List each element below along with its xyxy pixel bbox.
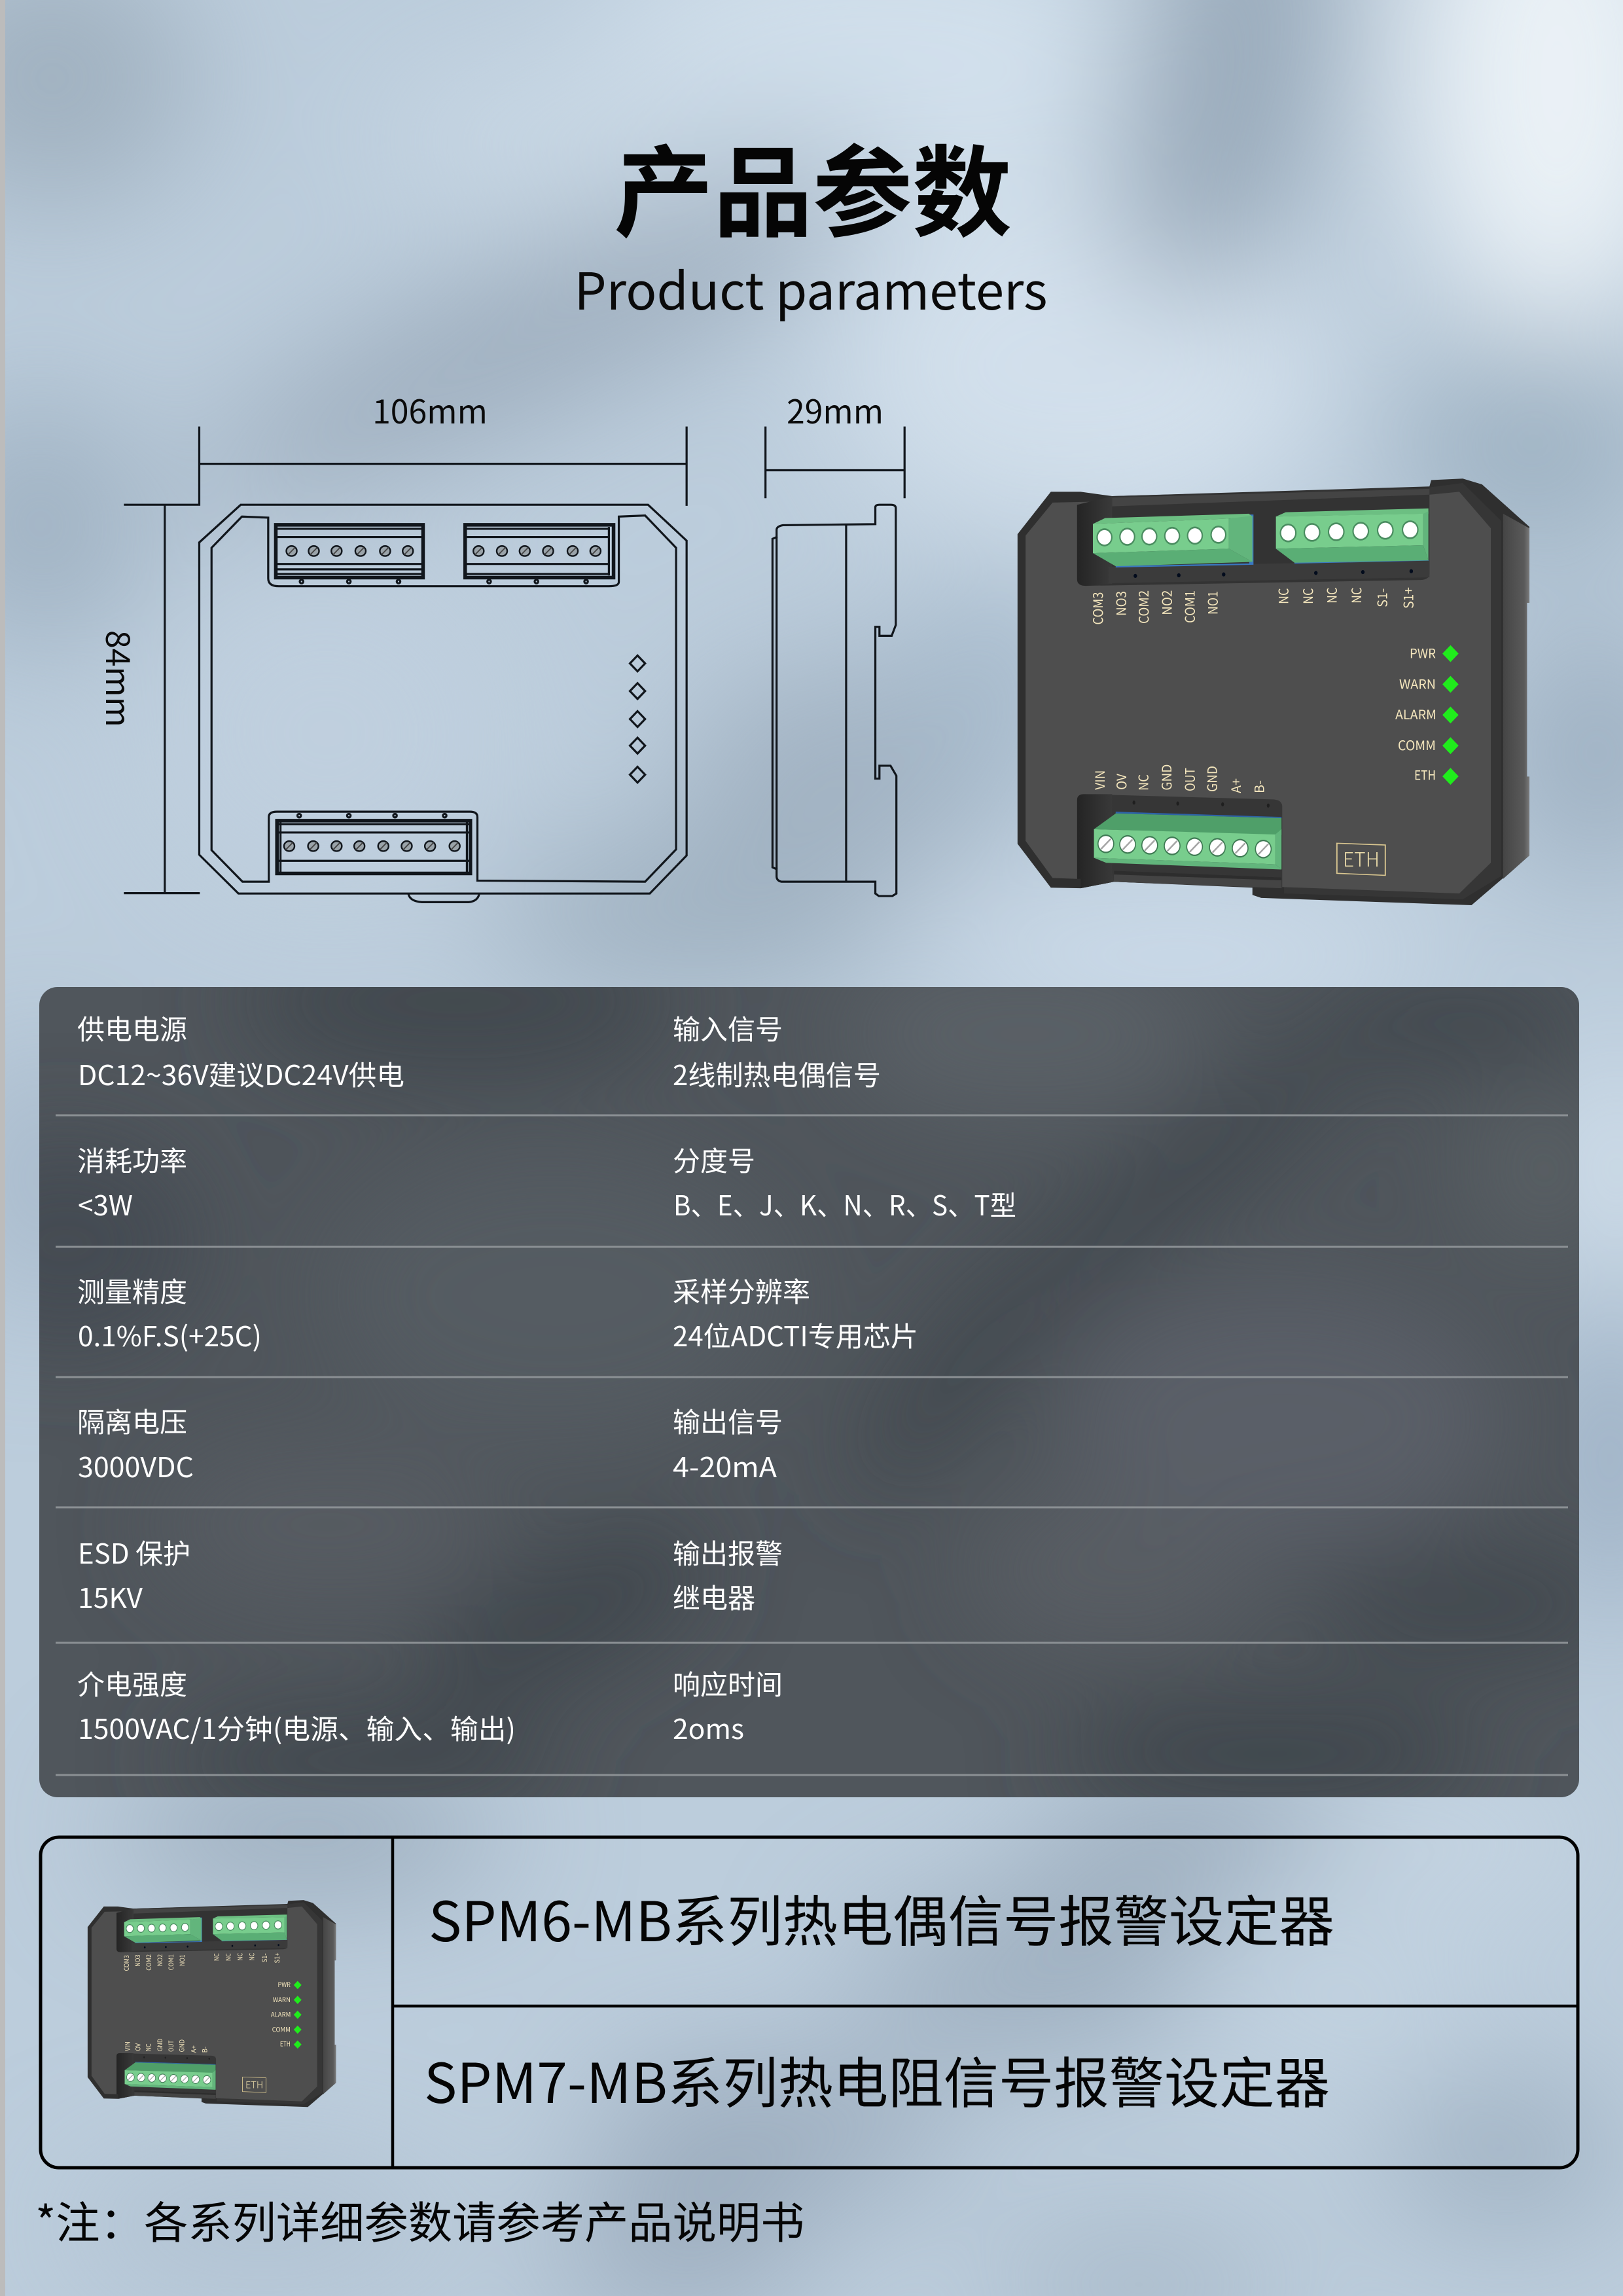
small device labels: ETH [280, 2039, 291, 2048]
device labels: S1- [1372, 588, 1391, 607]
spec: ESD: ESD 保护 [78, 1532, 190, 1572]
bottom recess [1077, 794, 1282, 888]
connector top left [1116, 514, 1253, 567]
small device labels: S1+ [272, 1952, 281, 1964]
spec: accuracy: 测量精度 [77, 1270, 187, 1310]
small device labels: COM2 [144, 1954, 153, 1971]
dimension label: 84mm: 84mm [96, 630, 143, 727]
device labels: ALARM [1395, 704, 1436, 723]
small device labels: ETH [245, 2078, 263, 2092]
device labels: OUT [1179, 768, 1198, 791]
small device labels: ALARM [271, 2010, 291, 2019]
device labels: PWR [1410, 643, 1436, 662]
spec: sampling resolution: 采样分辨率 [673, 1270, 810, 1310]
spec: response time: 2oms [673, 1708, 744, 1748]
top recess [1077, 488, 1429, 586]
terminal block: top left [276, 525, 423, 583]
device labels: COM3 [1088, 592, 1107, 624]
device labels: OV [1111, 774, 1130, 790]
small device labels: COM1 [166, 1954, 175, 1970]
table row dividers [56, 1115, 1568, 1775]
device labels: ETH [1414, 764, 1436, 784]
small device labels: NO1 [177, 1954, 187, 1966]
spec: output alarm [673, 1532, 783, 1617]
device labels: COMM [1398, 735, 1436, 754]
spec: dielectric strength: 1500VAC/1分钟(电源、输入、输出) [78, 1708, 516, 1748]
spec: output signal: 输出信号 [673, 1401, 783, 1441]
spec: ESD: 15KV [78, 1577, 143, 1617]
small device labels [122, 1952, 291, 2092]
device labels: NC [1133, 774, 1152, 791]
spec: input signal: 2线制热电偶信号 [673, 1054, 881, 1094]
small device labels: S1- [260, 1953, 269, 1962]
spec: power supply: DC12~36V建议DC24V供电 [78, 1054, 404, 1094]
small device labels: GND [177, 2039, 187, 2052]
small device labels: A+ [188, 2045, 198, 2053]
small device labels: COMM [272, 2024, 291, 2034]
small device labels: OV [133, 2043, 142, 2051]
device labels: GND [1156, 764, 1175, 791]
small device labels: NC [235, 1953, 244, 1961]
spec: power supply: 供电电源 [77, 1008, 187, 1048]
small device labels: NO2 [155, 1954, 164, 1966]
spec: dielectric strength [77, 1663, 516, 1748]
spec: accuracy: 0.1%F.S(+25C) [78, 1315, 262, 1355]
small device labels: NC [224, 1953, 233, 1961]
small device labels: OUT [166, 2040, 175, 2052]
side view line drawing [772, 505, 897, 896]
ETH label: ETH [1343, 844, 1380, 872]
connector bottom [1116, 812, 1281, 818]
spec: isolation voltage: 隔离电压 [77, 1401, 187, 1441]
dimension lines [124, 427, 904, 893]
device labels: NC [1346, 587, 1365, 603]
spec: graduation: B、E、J、K、N、R、S、T型 [673, 1184, 1016, 1224]
device labels: NO2 [1157, 590, 1175, 615]
connector top right [1294, 560, 1429, 564]
spec: response time: 响应时间 [673, 1663, 783, 1703]
spec: output signal [673, 1401, 783, 1486]
small device labels: NC [144, 2043, 153, 2051]
spec: ESD [78, 1532, 190, 1617]
spec: output alarm: 输出报警 [673, 1532, 783, 1572]
spec: isolation voltage: 3000VDC [78, 1446, 194, 1486]
spec: input signal: 输入信号 [673, 1008, 783, 1048]
device labels: COM2 [1133, 590, 1152, 624]
spec: power supply [77, 1008, 404, 1094]
device labels: COM1 [1179, 590, 1198, 623]
small device labels: PWR [277, 1980, 291, 1989]
device labels: WARN [1399, 674, 1436, 692]
device labels: S1+ [1398, 587, 1418, 609]
device body and terminals [1018, 478, 1529, 905]
device labels: B- [1249, 780, 1268, 793]
front view line drawing [199, 505, 687, 902]
spec: isolation voltage [77, 1401, 194, 1486]
dimension label: 106mm: 106mm [372, 386, 488, 433]
spec: sampling resolution [673, 1270, 918, 1355]
subtitle: Product parameters [574, 251, 1048, 325]
small product photo [88, 1900, 336, 2107]
small device labels: WARN [273, 1995, 291, 2004]
device labels: NC [1321, 587, 1340, 603]
title: 产品参数 [614, 113, 1012, 257]
spec: dielectric strength: 介电强度 [77, 1663, 187, 1703]
device labels: VIN [1090, 770, 1109, 790]
product photo: device with terminals [1018, 478, 1529, 905]
spec: output signal: 4-20mA [673, 1446, 777, 1486]
small device labels: NO3 [133, 1954, 142, 1967]
small device labels: COM3 [122, 1955, 131, 1971]
small device labels: GND [155, 2038, 164, 2051]
footnote: *注：各系列详细参数请参考产品说明书 [35, 2188, 804, 2251]
small device labels: B- [200, 2047, 209, 2053]
model name: SPM7: SPM7-MB系列热电阻信号报警设定器 [424, 2040, 1330, 2119]
small device body [88, 1900, 336, 2107]
small device labels: NC [211, 1953, 221, 1961]
small device labels: VIN [123, 2041, 132, 2051]
device labels: NC [1273, 588, 1292, 604]
spec: sampling resolution: 24位ADCTI专用芯片 [673, 1315, 918, 1355]
spec: accuracy [77, 1270, 262, 1355]
panel: model list [41, 1837, 1578, 2168]
dimension label: 29mm: 29mm [787, 386, 883, 433]
LED diamonds [1442, 645, 1459, 785]
device labels [1088, 587, 1436, 793]
device labels: GND [1202, 766, 1221, 792]
ETH box [1337, 843, 1385, 875]
LED diamonds [630, 656, 645, 783]
device labels: A+ [1226, 778, 1245, 793]
spec: power consumption [77, 1139, 187, 1224]
model name: SPM6: SPM6-MB系列热电偶信号报警设定器 [429, 1878, 1334, 1958]
panel: parameter table [0, 923, 1623, 1813]
device labels: NC [1298, 588, 1317, 604]
spec: power consumption: <3W [78, 1184, 133, 1224]
spec: graduation: 分度号 [673, 1139, 755, 1179]
small device labels: NC [247, 1953, 257, 1961]
spec: graduation [673, 1139, 1016, 1224]
device labels: NO3 [1111, 591, 1130, 616]
spec: power consumption: 消耗功率 [77, 1139, 187, 1179]
terminal block: top right [465, 525, 614, 583]
terminal block: bottom [277, 814, 471, 873]
device labels: NO1 [1203, 591, 1222, 615]
spec: response time [673, 1663, 783, 1748]
spec: output alarm: 继电器 [673, 1577, 755, 1617]
spec: input signal [673, 1008, 881, 1094]
